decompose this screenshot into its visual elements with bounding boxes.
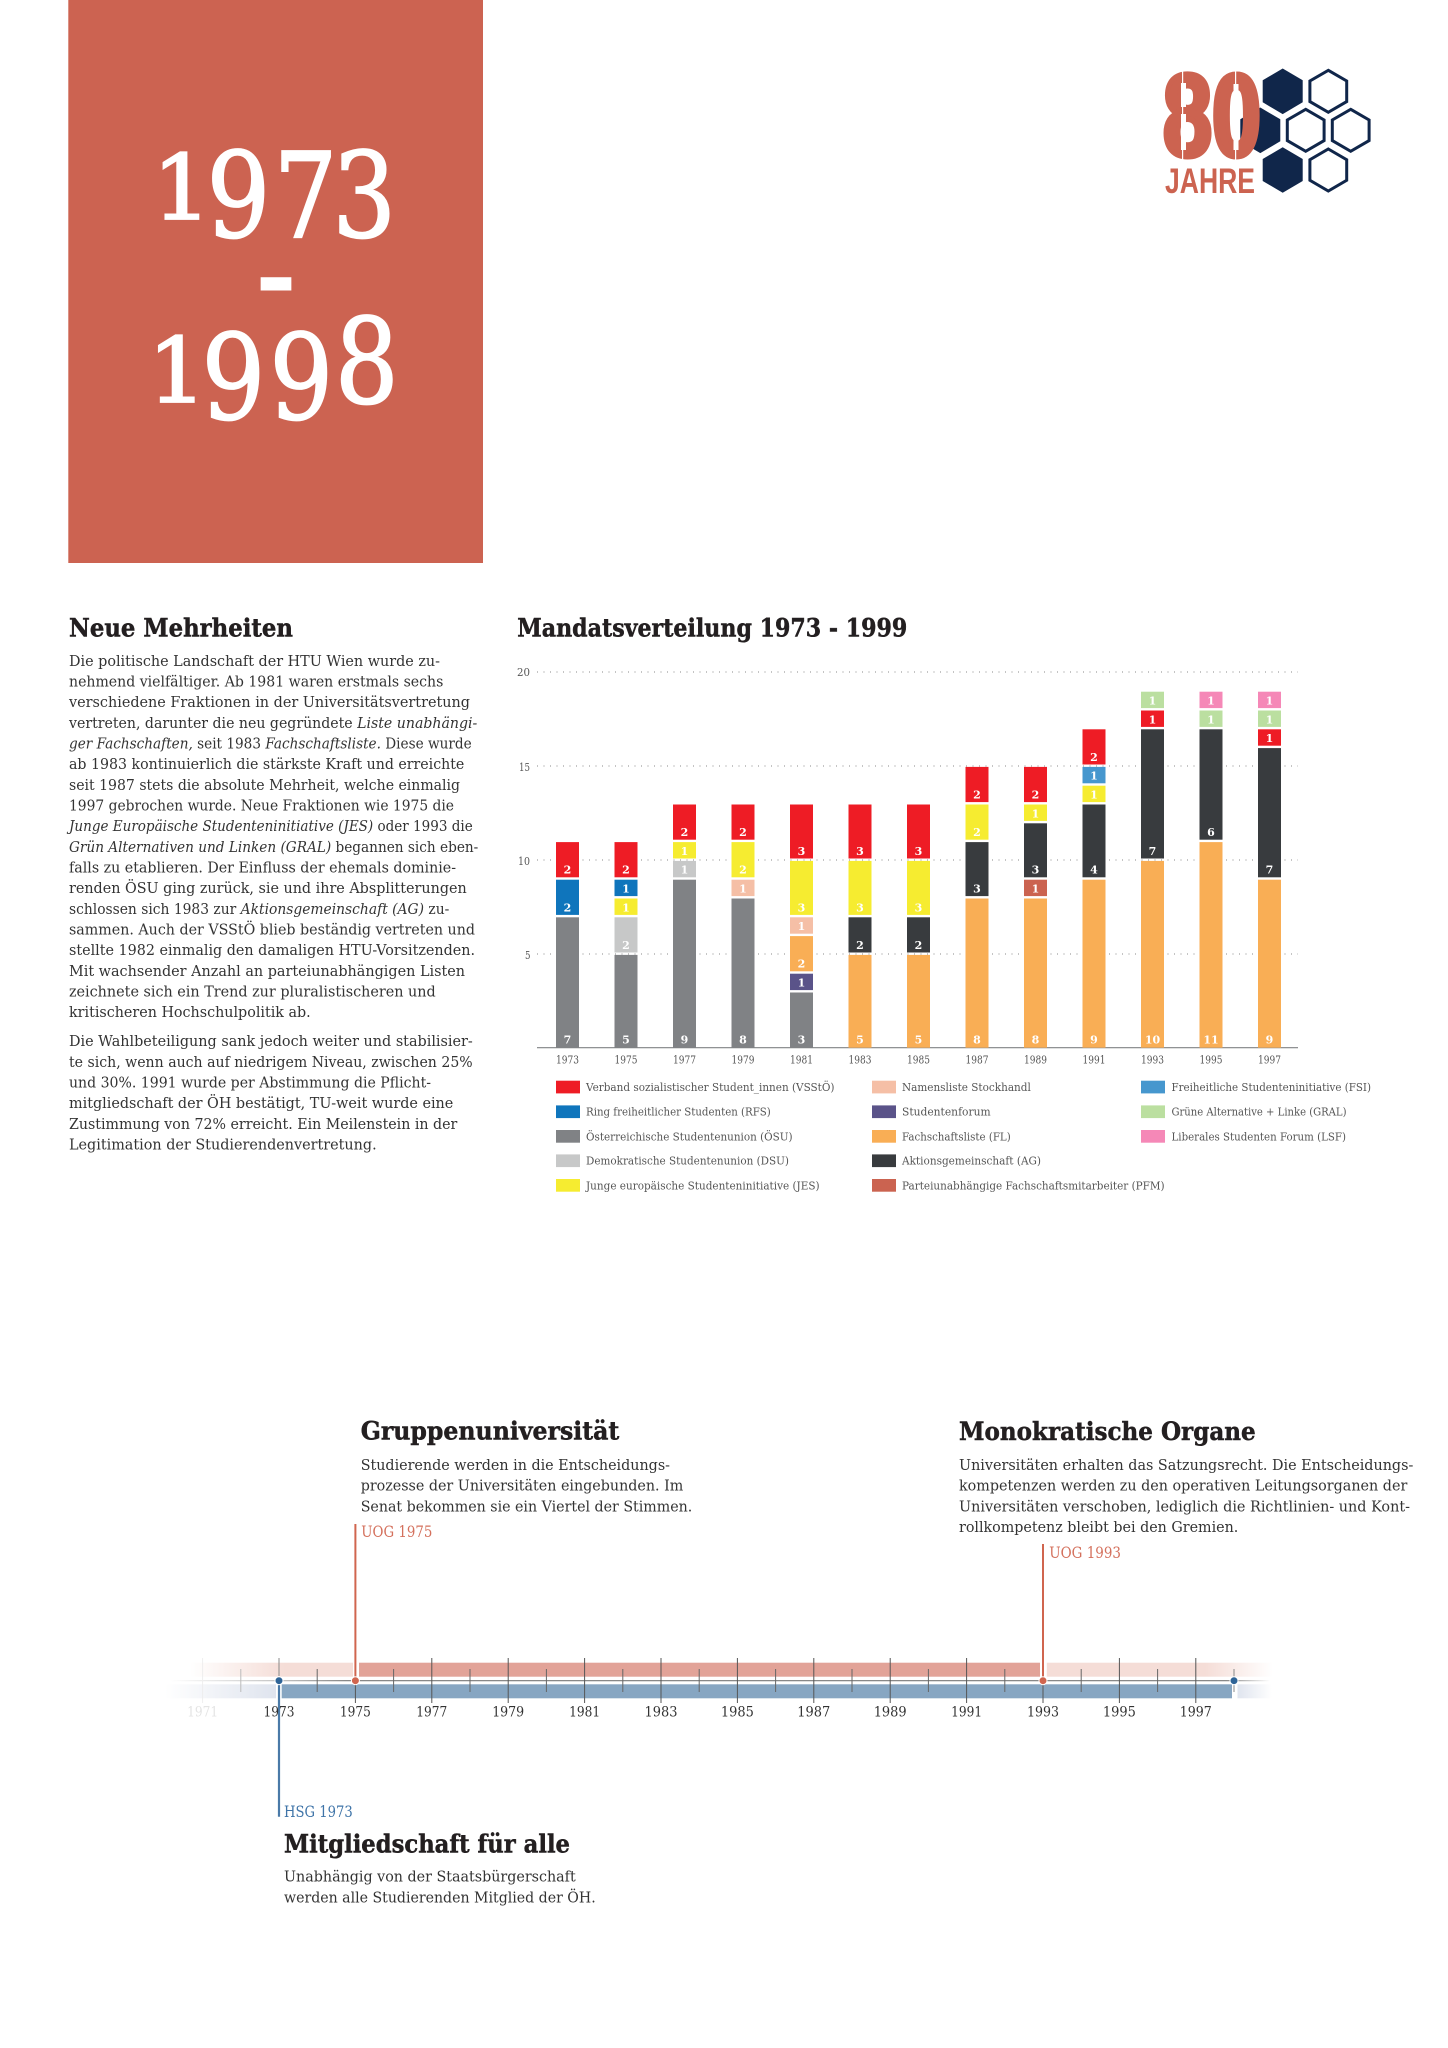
title: 1973: 3 [332, 127, 396, 265]
title: 1973: 1 [152, 135, 212, 241]
bar: 1993: 7 [1149, 845, 1156, 858]
bar: 1973: 2 [564, 864, 571, 877]
text block: paragraph 1: schlossen sich 1983 zur Aktionsgemeinschaft (AG) zu- [69, 900, 449, 918]
bar: 1973: 7 [564, 1034, 571, 1046]
bar: 1975: 1 [622, 901, 630, 914]
line: UOG 1993 [1042, 1544, 1044, 1680]
axis: x labels: 1981 [790, 1053, 813, 1066]
bar: 1977 [673, 804, 696, 1048]
bar: 1997 [1258, 692, 1281, 1048]
callout: Gruppenuniversität: Gruppenuniversität [361, 1416, 620, 1445]
bar: 1995 [1200, 692, 1222, 1048]
bar: 1991: 9 [1090, 1034, 1098, 1046]
axis: y labels [517, 666, 530, 962]
bar: 1975: 2 [622, 939, 630, 952]
bar: 1975 [614, 842, 638, 1048]
axis: x labels: 1995 [1200, 1053, 1222, 1066]
axis: y labels: 15 [519, 761, 530, 774]
bar: 1975: 2 [622, 864, 630, 877]
legend: Grüne Alternative + Linke (GRAL) [1172, 1105, 1346, 1119]
bar: 1997: 1 [1266, 713, 1273, 726]
legend: Verband sozialistischer Student_innen (VSStÖ) [585, 1080, 834, 1094]
timeline: year labels: 1991 [951, 1704, 982, 1720]
callout: Monokratische Organe: rollkompetenz bleibt bei den Gremien. [959, 1518, 1238, 1536]
bar: 1983: 3 [856, 845, 864, 858]
timeline: year labels: 1993 [1027, 1704, 1059, 1720]
bar: 1981: 3 [798, 845, 805, 858]
legend: Liberales Studenten Forum (LSF) [1172, 1129, 1346, 1143]
text block: paragraph 1: 1997 gebrochen wurde. Neue Fraktionen wie 1975 die [69, 796, 454, 814]
title: 1998: 1 [147, 318, 207, 424]
legend: Aktionsgemeinschaft (AG) [901, 1154, 1041, 1168]
axis: x labels: 1985 [907, 1053, 930, 1066]
timeline: year labels: 1985 [721, 1704, 754, 1720]
bar: 1977: 9 [681, 1034, 688, 1046]
bar: 1993: 1 [1149, 694, 1156, 708]
bar: 1981 [790, 804, 813, 1048]
title: 1998: 8 [335, 293, 399, 431]
timeline [165, 1524, 1273, 1817]
legend [556, 1080, 1371, 1192]
bar: 1991: 1 [1090, 770, 1098, 783]
bar: 1991: 1 [1090, 788, 1098, 802]
panel: title block [68, 0, 483, 563]
bar: 1991 [1082, 729, 1106, 1048]
bar: 1997: 9 [1266, 1034, 1273, 1046]
callout: Gruppenuniversität [361, 1416, 692, 1541]
legend: Studentenforum [902, 1105, 991, 1119]
callout: Monokratische Organe: Universitäten verschoben, lediglich die Richtlinien- und Kont- [959, 1497, 1410, 1515]
text block: paragraph 1: nehmend vielfältiger. Ab 1981 waren erstmals sechs [69, 672, 443, 690]
bar: 1989: 1 [1032, 807, 1039, 820]
text block: paragraph 1: Mit wachsender Anzahl an parteiunabhängigen Listen [69, 962, 465, 980]
legend: Österreichische Studentenunion (ÖSU) [586, 1129, 793, 1143]
bar: 1981: 1 [798, 976, 805, 990]
bar: 1983: 2 [856, 939, 864, 952]
timeline: year labels [187, 1704, 1212, 1720]
bar: 1985 [907, 804, 930, 1048]
title: 1973: 9 [207, 127, 270, 265]
text block: paragraph 2: te sich, wenn auch auf niedrigem Niveau, zwischen 25% [69, 1053, 473, 1071]
text block: paragraph 1: kritischeren Hochschulpolitik ab. [69, 1003, 311, 1021]
bar: 1997: 7 [1266, 864, 1273, 877]
axis: x labels: 1989 [1024, 1053, 1047, 1066]
bar: 1977: 1 [681, 845, 688, 858]
text block: paragraph 1: zeichnete sich ein Trend zur pluralistischeren und [69, 982, 436, 1000]
bar: 1973 [556, 842, 579, 1048]
callout: Mitgliedschaft für alle [284, 1802, 596, 1906]
legend: Junge europäische Studenteninitiative (JES) [585, 1178, 820, 1192]
bar: 1987: 2 [973, 826, 981, 839]
legend: Demokratische Studentenunion (DSU) [586, 1154, 789, 1168]
bar: 1981: 1 [798, 920, 805, 933]
callout: Gruppenuniversität: Senat bekommen sie ein Viertel der Stimmen. [361, 1497, 692, 1515]
bar: 1985: 5 [915, 1034, 922, 1046]
title: 1973: 7 [274, 127, 338, 265]
logo: 80 Jahre [1163, 50, 1369, 201]
callout: Monokratische Organe [959, 1417, 1413, 1562]
bar: 1989: 1 [1032, 882, 1039, 896]
callout: Mitgliedschaft für alle: Unabhängig von der Staatsbürgerschaft [284, 1868, 576, 1886]
bar: 1981: 3 [798, 1034, 805, 1046]
axis: x labels: 1991 [1082, 1053, 1106, 1066]
timeline: year labels: 1987 [797, 1704, 830, 1720]
heading: Mandatsverteilung: Mandatsverteilung 1973 - 1999 [517, 614, 907, 643]
bar: 1991: 4 [1090, 864, 1098, 877]
legend: Freiheitliche Studenteninitiative (FSI) [1172, 1080, 1371, 1094]
bar: 1993: 1 [1149, 713, 1156, 726]
callout: Mitgliedschaft für alle: Mitgliedschaft für alle [284, 1830, 570, 1859]
axis: x labels [556, 1053, 1281, 1066]
callout: Monokratische Organe: Monokratische Organe [959, 1417, 1256, 1446]
bar: 1977: 2 [681, 826, 688, 839]
bar: 1995: 1 [1207, 713, 1215, 726]
bar: 1979: 8 [739, 1034, 747, 1046]
logo: 80 Jahre: JAHRE [1165, 162, 1255, 201]
text block: paragraph 1: falls zu etablieren. Der Einfluss der ehemals dominie- [69, 858, 456, 876]
text block: paragraph 1: seit 1987 stets die absolute Mehrheit, welche einmalig [69, 776, 460, 794]
axis: x labels: 1973 [556, 1053, 579, 1066]
bar: 1977: 1 [681, 864, 688, 877]
timeline: year labels: 1975 [340, 1704, 371, 1720]
axis: y labels: 20 [517, 666, 530, 679]
bar: 1983: 3 [856, 901, 864, 914]
callout: Gruppenuniversität: UOG 1975 [361, 1522, 432, 1541]
callout: Monokratische Organe: kompetenzen werden zu den operativen Leitungsorganen der [959, 1477, 1408, 1495]
bar: 1983 [848, 804, 872, 1048]
logo: 80 Jahre: 80 [1163, 50, 1261, 180]
bar: 1995: 1 [1207, 694, 1215, 708]
text block: paragraph 1: stellte 1982 einmalig den damaligen HTU-Vorsitzenden. [69, 941, 475, 959]
bar: 1997: 1 [1266, 732, 1273, 745]
callout: Monokratische Organe: UOG 1993 [1049, 1543, 1121, 1562]
callout: Monokratische Organe: Universitäten erhalten das Satzungsrecht. Die Entscheidungs- [959, 1456, 1413, 1474]
text block: paragraph 1: ab 1983 kontinuierlich die stärkste Kraft und erreichte [69, 755, 464, 773]
bar: 1987 [966, 767, 988, 1048]
bar: 1979: 2 [739, 826, 747, 839]
bar: 1987: 3 [973, 882, 981, 896]
callout: Gruppenuniversität: Studierende werden in die Entscheidungs- [361, 1456, 670, 1474]
bar: 1989: 2 [1032, 788, 1039, 802]
bar: 1995: 11 [1203, 1034, 1219, 1046]
axis: x labels: 1997 [1258, 1053, 1281, 1066]
bar: 1985: 2 [915, 939, 922, 952]
bar: 1975: 5 [622, 1034, 630, 1046]
axis: x labels: 1975 [614, 1053, 638, 1066]
bar: 1981: 2 [798, 958, 805, 971]
timeline: year labels: 1979 [492, 1704, 524, 1720]
marker: 1998 [1230, 1677, 1238, 1685]
bar: 1979 [732, 804, 754, 1048]
axis: x labels: 1979 [732, 1053, 754, 1066]
callout: Mitgliedschaft für alle: werden alle Studierenden Mitglied der ÖH. [284, 1888, 596, 1906]
legend: Parteiunabhängige Fachschaftsmitarbeiter (PFM) [902, 1178, 1165, 1192]
title: 1998: 9 [201, 309, 265, 447]
bar: 1979: 1 [739, 882, 747, 896]
timeline: year labels: 1995 [1103, 1704, 1136, 1720]
timeline: year labels: 1977 [416, 1704, 447, 1720]
bar: 1991: 2 [1090, 751, 1098, 764]
bar: 1985: 3 [915, 845, 922, 858]
axis: x labels: 1977 [673, 1053, 696, 1066]
bar: 1979: 2 [739, 864, 747, 877]
text block: paragraph 1: Grün Alternativen und Linken (GRAL) begannen sich eben- [69, 838, 478, 856]
marker: 1975 [351, 1677, 359, 1685]
text block: paragraph 2: Die Wahlbeteiligung sank jedoch weiter und stabilisier- [69, 1032, 473, 1050]
callout: Gruppenuniversität: prozesse der Universitäten eingebunden. Im [361, 1477, 683, 1495]
text block: paragraph 2 [69, 1032, 473, 1154]
text block: paragraph 2: Zustimmung von 72% erreicht. Ein Meilenstein in der [69, 1115, 458, 1133]
legend: Namensliste Stockhandl [902, 1080, 1031, 1094]
text block: paragraph 1: vertreten, darunter die neu gegründete Liste unabhängi- [68, 714, 477, 732]
bar: 1993: 10 [1145, 1034, 1160, 1046]
axis: x labels: 1983 [848, 1053, 872, 1066]
bar: 1997: 1 [1266, 694, 1273, 708]
timeline: year labels: 1973 [264, 1704, 294, 1720]
timeline: year labels: 1971 [187, 1704, 218, 1720]
callout: Mitgliedschaft für alle: HSG 1973 [284, 1802, 353, 1821]
bar: 1983: 5 [856, 1034, 864, 1046]
bar: 1993 [1141, 692, 1164, 1048]
text block: paragraph 2: mitgliedschaft der ÖH bestätigt, TU-weit wurde eine [69, 1094, 453, 1112]
timeline: year labels: 1981 [569, 1704, 600, 1720]
text block: paragraph 1: Die politische Landschaft der HTU Wien wurde zu- [69, 652, 440, 670]
text block: paragraph 1: renden ÖSU ging zurück, sie und ihre Absplitterungen [69, 879, 467, 897]
text block: paragraph 1: Junge Europäische Studenteninitiative (JES) oder 1993 die [66, 817, 473, 835]
timeline: year labels: 1983 [644, 1704, 678, 1720]
title: 1998: 9 [269, 309, 333, 447]
timeline: year labels: 1989 [874, 1704, 907, 1720]
marker: 1973 [275, 1677, 283, 1685]
legend: Fachschaftsliste (FL) [902, 1129, 1011, 1143]
bar: 1989 [1024, 767, 1047, 1048]
bar: 1975: 1 [622, 882, 630, 896]
bar: 1973: 2 [564, 901, 571, 914]
heading: Neue Mehrheiten: Neue Mehrheiten [69, 613, 293, 642]
line: UOG 1975 [354, 1524, 356, 1680]
marker: 1993 [1039, 1677, 1047, 1685]
bar: 1989: 3 [1032, 864, 1039, 877]
bar: 1985: 3 [915, 901, 922, 914]
text block: paragraph 1: ger Fachschaften, seit 1983 Fachschaftsliste. Diese wurde [69, 734, 472, 752]
text block: paragraph 1: verschiedene Fraktionen in der Universitätsvertretung [68, 693, 470, 711]
timeline: year labels: 1997 [1180, 1704, 1212, 1720]
text block: paragraph 2: und 30%. 1991 wurde per Abstimmung die Pflicht- [69, 1074, 431, 1092]
text block: paragraph 2: Legitimation der Studierendenvertretung. [69, 1136, 377, 1154]
axis: y labels: 5 [525, 949, 530, 962]
axis: x labels: 1987 [966, 1053, 988, 1066]
text block: paragraph 1 [66, 652, 478, 1021]
bar: 1987: 2 [973, 788, 981, 802]
bar: 1981: 3 [798, 901, 805, 914]
axis: y labels: 10 [518, 855, 530, 868]
chart: stacked bars Mandatsverteilung [517, 666, 1298, 1066]
bar: 1995: 6 [1207, 826, 1215, 839]
text block: paragraph 1: sammen. Auch der VSStÖ blieb beständig vertreten und [69, 920, 475, 938]
title: dash: - [255, 217, 297, 335]
axis: x labels: 1993 [1141, 1053, 1164, 1066]
line: HSG 1973 [278, 1680, 280, 1817]
bar: 1989: 8 [1032, 1034, 1040, 1046]
bar: 1987: 8 [973, 1034, 981, 1046]
legend: Ring freiheitlicher Studenten (RFS) [586, 1105, 771, 1119]
